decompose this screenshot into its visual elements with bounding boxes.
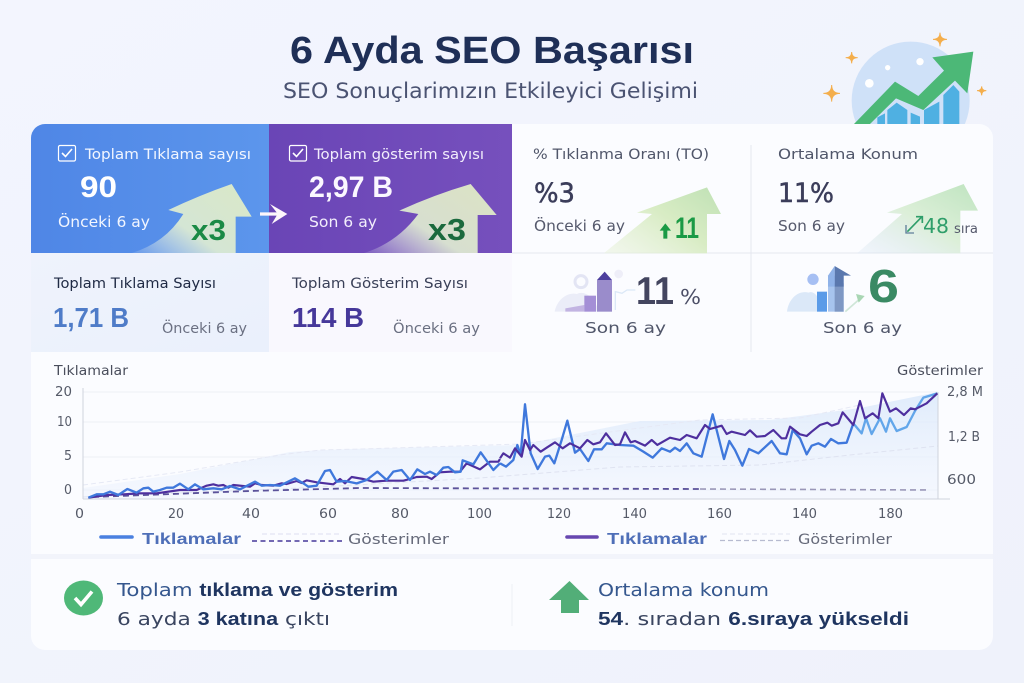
illustration: growth arrow with sparkles xyxy=(823,33,986,160)
main card xyxy=(31,124,993,650)
multiplier x3: x3 xyxy=(428,212,466,247)
label: total clicks: Toplam Tıklama sayısı xyxy=(84,147,251,163)
period: Son 6 ay xyxy=(823,319,902,337)
period: Son 6 ay xyxy=(585,319,666,337)
x axis ticks: 40 xyxy=(242,506,260,522)
label: total impressions: Toplam gösterim sayısı xyxy=(313,147,484,163)
icon: growth arrow xyxy=(604,187,721,253)
multiplier x3: x3 xyxy=(191,215,226,247)
panel: total clicks summary xyxy=(31,253,269,352)
value: 90: 90 xyxy=(80,171,117,204)
blue clicks series xyxy=(88,452,500,498)
line chart xyxy=(53,363,983,548)
period: Önceki 6 ay xyxy=(162,319,247,337)
value: 11: 11 xyxy=(675,212,699,245)
dashed impressions line fading xyxy=(700,489,930,490)
callout line one: Ortalama konum xyxy=(598,580,769,601)
callout: average position climbed xyxy=(549,580,909,630)
value: 11: 11 xyxy=(636,270,674,313)
icon: growth arrow xyxy=(363,184,497,253)
value: 2,97 B: 2,97 B xyxy=(309,171,393,204)
y axis title: impressions: Gösterimler xyxy=(897,363,983,379)
value: 1,71 B: 1,71 B xyxy=(53,302,129,333)
panel: average position xyxy=(778,147,978,253)
callout line two: 6 ayda 3 katına çıktı xyxy=(117,609,330,630)
icon: checkbox xyxy=(290,146,306,161)
label: % Tıklanma Oranı (TO) xyxy=(533,147,709,163)
y axis ticks: right xyxy=(947,384,983,488)
icon: small up arrow xyxy=(660,223,671,239)
x axis ticks: 0 xyxy=(75,506,84,522)
period: last 6 months: Son 6 ay xyxy=(309,213,377,231)
icon: growth arrow xyxy=(857,184,978,253)
unit: percent: % xyxy=(680,285,701,309)
purple clicks series continued xyxy=(500,393,937,458)
value: 11%: 11% xyxy=(778,178,834,209)
y axis ticks: right: 1,2 B xyxy=(948,429,980,445)
legend: purple clicks and impressions: Tıklamalar xyxy=(607,531,707,548)
panel: latest position xyxy=(787,260,902,337)
icon: green check xyxy=(64,580,103,616)
y axis ticks: right: 2,8 M xyxy=(947,384,983,400)
label: Toplam Tıklama Sayısı xyxy=(53,276,216,292)
icon: growth arrow xyxy=(131,184,252,253)
arrow: previous to latest xyxy=(260,204,287,224)
panel: click-through rate xyxy=(533,147,721,253)
panel: total clicks previous xyxy=(31,124,269,253)
icon: diagonal arrow xyxy=(906,217,922,233)
y axis ticks: left xyxy=(55,384,72,498)
value: %3: %3 xyxy=(534,178,575,209)
period: Son 6 ay xyxy=(778,217,845,235)
value: 6: 6 xyxy=(868,260,899,312)
title: 6 Ayda SEO Başarısı xyxy=(290,30,694,72)
y axis ticks: left: 10 xyxy=(57,414,72,430)
x axis ticks: 140 xyxy=(792,506,817,522)
callout line one: Toplam tıklama ve gösterim xyxy=(116,580,398,601)
legend: purple clicks and impressions: Gösterimler xyxy=(798,532,892,548)
y axis ticks: right: 600 xyxy=(947,472,976,488)
period: Önceki 6 ay xyxy=(393,319,480,337)
value: 48: 48 xyxy=(923,214,949,238)
y axis ticks: left: 20 xyxy=(55,384,72,400)
panel: latest CTR xyxy=(555,270,701,337)
label: Ortalama Konum xyxy=(778,147,918,163)
x axis ticks: 160 xyxy=(707,506,732,522)
x axis ticks: 80 xyxy=(391,506,409,522)
value: 114 B: 114 B xyxy=(292,302,364,333)
panel: total impressions latest xyxy=(269,124,512,253)
y axis ticks: left: 5 xyxy=(64,448,72,464)
x axis ticks: 140 xyxy=(622,506,647,522)
x axis ticks: 60 xyxy=(319,506,337,522)
x axis ticks: 100 xyxy=(467,506,492,522)
subtitle: SEO Sonuçlarimızın Etkileyici Gelişimi xyxy=(283,79,698,104)
x axis ticks: 20 xyxy=(168,506,184,522)
callout: clicks and impressions tripled xyxy=(64,580,398,630)
period: previous 6 months: Önceki 6 ay xyxy=(58,212,150,231)
unit: sıra: sıra xyxy=(954,222,978,237)
panel: total impressions summary xyxy=(269,253,512,352)
icon: purple bars xyxy=(555,270,635,312)
x axis ticks xyxy=(75,506,903,522)
period: Önceki 6 ay xyxy=(534,216,625,235)
legend: blue clicks and impressions: Gösterimler xyxy=(348,532,449,548)
x axis ticks: 180 xyxy=(878,506,903,522)
y axis ticks: left: 0 xyxy=(64,482,72,498)
legend: purple clicks and impressions xyxy=(567,531,892,548)
x axis ticks: 120 xyxy=(547,506,571,522)
legend: blue clicks and impressions: Tıklamalar xyxy=(142,531,241,548)
dashed impressions line xyxy=(93,488,700,497)
icon: green up arrow xyxy=(549,581,589,613)
purple clicks series xyxy=(88,459,500,498)
area fill xyxy=(83,392,938,499)
blue clicks series continued xyxy=(500,393,937,469)
icon: blue bars xyxy=(787,266,865,312)
y axis title: clicks: Tıklamalar xyxy=(53,363,128,379)
legend: blue clicks and impressions xyxy=(101,531,449,548)
icon: checkbox xyxy=(58,146,76,161)
label: Toplam Gösterim Sayısı xyxy=(291,276,468,292)
callout line two: 54 . sıradan 6.sıraya yükseldi xyxy=(598,609,909,630)
